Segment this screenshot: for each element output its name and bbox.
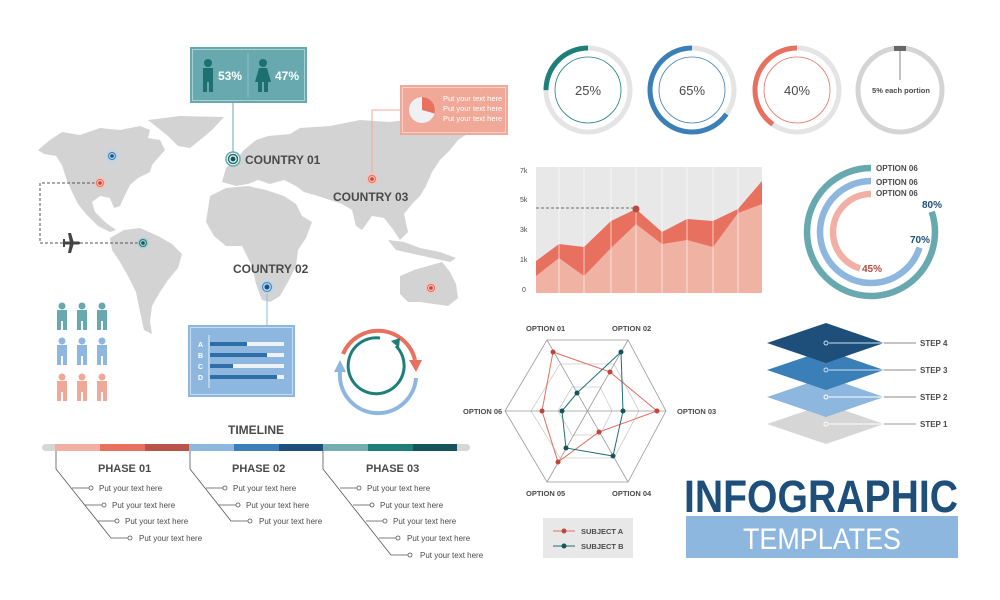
radial bar chart: OPTION 06 <box>876 189 918 198</box>
continent: eurasia <box>222 118 470 240</box>
donut: 65%: 65% <box>679 83 705 98</box>
pie callout box: Put your text here <box>443 104 502 113</box>
continent: africa <box>206 186 312 302</box>
steps diagram: STEP 3 <box>920 366 948 375</box>
continent: north america <box>38 126 165 232</box>
donut: 5% each portion: 5% each portion <box>872 86 930 95</box>
radar chart: OPTION 02 <box>612 324 651 333</box>
bar chart box: A <box>198 342 203 349</box>
donut: 65% <box>650 48 734 132</box>
steps diagram <box>767 323 948 444</box>
timeline: Put your text here <box>380 501 444 510</box>
cycle arrows icon <box>334 331 422 413</box>
title: INFOGRAPHIC <box>684 471 958 522</box>
steps diagram: STEP 2 <box>920 393 948 402</box>
timeline <box>42 423 484 560</box>
radial bar chart: OPTION 06 <box>876 164 918 173</box>
bar chart box: B <box>198 353 203 360</box>
continent: greenland <box>148 116 224 148</box>
radar legend <box>543 518 633 558</box>
bar chart box: C <box>198 364 203 371</box>
donut: 25% <box>546 48 630 132</box>
radar chart: OPTION 06 <box>463 407 502 416</box>
radial bar chart: 70% <box>910 235 930 246</box>
area chart: 1k <box>520 257 528 264</box>
timeline: Put your text here <box>420 551 484 560</box>
steps diagram: STEP 1 <box>920 420 948 429</box>
timeline: PHASE 03 <box>366 463 419 475</box>
timeline: Put your text here <box>233 484 297 493</box>
timeline: Put your text here <box>259 517 323 526</box>
area chart: 3k <box>520 227 528 234</box>
radar legend: SUBJECT B <box>581 542 624 551</box>
icon: female <box>255 59 271 92</box>
timeline: Put your text here <box>125 517 189 526</box>
timeline: Put your text here <box>246 501 310 510</box>
timeline: Put your text here <box>139 534 203 543</box>
radial bar chart: OPTION 06 <box>876 178 918 187</box>
radar chart <box>463 324 716 498</box>
pie callout box: Put your text here <box>443 94 502 103</box>
radial bar chart: 45% <box>862 264 882 275</box>
gender box <box>190 47 307 103</box>
icon: plane <box>63 233 80 253</box>
radial bar chart: 80% <box>922 200 942 211</box>
continent: south america <box>110 228 182 334</box>
country labels: COUNTRY 01 <box>245 153 321 167</box>
islands: southeast asia <box>388 240 456 262</box>
area chart: 0 <box>522 287 526 294</box>
donut: 40%: 40% <box>784 83 810 98</box>
map markers <box>94 150 436 294</box>
area chart <box>520 167 762 294</box>
radar legend: SUBJECT A <box>581 527 624 536</box>
title <box>684 471 958 558</box>
world map <box>38 116 470 334</box>
gender box: 53% <box>218 69 242 83</box>
country labels: COUNTRY 02 <box>233 262 309 276</box>
country labels: COUNTRY 03 <box>333 190 409 204</box>
people icons <box>57 302 107 401</box>
donut: 40% <box>755 48 839 132</box>
pie callout box: Put your text here <box>443 114 502 123</box>
timeline: TIMELINE <box>228 423 284 437</box>
timeline: Put your text here <box>407 534 471 543</box>
radial bar chart <box>807 164 942 296</box>
country labels <box>233 153 409 276</box>
bar chart box <box>188 325 295 397</box>
radar chart: OPTION 05 <box>526 489 565 498</box>
radar chart: OPTION 01 <box>526 324 565 333</box>
bar chart box: D <box>198 375 203 382</box>
donut: 5% each portion <box>858 46 942 132</box>
donut: 25%: 25% <box>575 83 601 98</box>
steps diagram: STEP 4 <box>920 339 948 348</box>
pie callout box <box>400 85 508 135</box>
timeline: PHASE 02 <box>232 463 285 475</box>
timeline: Put your text here <box>367 484 431 493</box>
route dashed line with plane <box>40 183 143 253</box>
radar chart: OPTION 04 <box>612 489 652 498</box>
area chart: 7k <box>520 168 528 175</box>
timeline: Put your text here <box>99 484 163 493</box>
timeline: Put your text here <box>112 501 176 510</box>
continent: australia <box>400 262 458 306</box>
radar chart: OPTION 03 <box>677 407 716 416</box>
icon: male <box>203 59 213 92</box>
timeline: PHASE 01 <box>98 463 151 475</box>
gender box: 47% <box>275 69 299 83</box>
timeline: Put your text here <box>393 517 457 526</box>
title: TEMPLATES <box>743 523 901 556</box>
area chart: 5k <box>520 197 528 204</box>
